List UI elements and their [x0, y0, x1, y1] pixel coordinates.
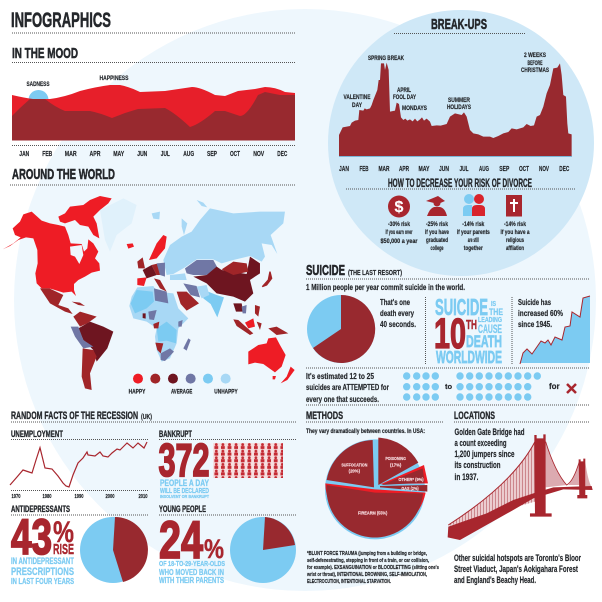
text: to: to: [445, 382, 452, 391]
legend: UNHAPPY: [214, 388, 238, 395]
labels: pie: (17%): [390, 463, 402, 469]
text: one death: That's one: [380, 297, 410, 307]
axis: years: 2000: [106, 494, 114, 500]
axis: years: [12, 494, 148, 500]
text: earn: if you earn over: [386, 229, 413, 236]
text: increased 60%: increased 60%: [518, 308, 563, 318]
chart: world map: [3, 196, 295, 395]
text: estimated: It's estimated 12 to 25: [306, 371, 374, 381]
labels: pie: GAS (2%): [401, 486, 419, 491]
panel: suicide: [306, 262, 590, 405]
text: golden gate: Golden Gate Bridge had: [454, 427, 524, 437]
callout: 43%: 43: [11, 509, 52, 565]
chart: young people pie: [230, 517, 296, 583]
label: april fool day: [393, 87, 416, 101]
heading: around the world: AROUND THE WORLD: [12, 166, 115, 183]
region: russia: [152, 200, 285, 275]
panel: break-ups circle: [328, 10, 594, 276]
panel: locations: [448, 410, 593, 585]
text: golden gate: [454, 427, 524, 482]
subheading: the last resort: (THE LAST RESORT): [348, 270, 402, 277]
callout: 43%: IN LAST FOUR YEARS: [11, 577, 74, 586]
text: graduated: graduated: [426, 237, 448, 244]
text: for: for: [549, 382, 560, 391]
months axis: break-ups: JUL: [460, 166, 469, 173]
months axis: mood: [19, 151, 287, 158]
legend: AVERAGE: [171, 388, 193, 395]
text: footnote: ELECTROCUTION, INTENTIONAL STARVATION.: [307, 579, 391, 585]
label: summer holidays: [447, 97, 471, 111]
region: south america: [71, 312, 113, 390]
text: religious: -14% risk: [504, 221, 526, 228]
callout: 10th leading cause: THE: [489, 307, 503, 317]
text: graduated: college: [430, 245, 444, 252]
label: 2 weeks before christmas: CHRISTMAS: [521, 67, 549, 74]
heading: bankrupt: BANKRUPT: [159, 429, 192, 439]
months axis: break-ups: MAR: [378, 166, 390, 173]
months axis: break-ups: APR: [399, 166, 409, 173]
text: parents: are still: [468, 237, 479, 244]
text: footnote: self-defenestrating, stepping in front of a train, or car collision,: [307, 558, 429, 564]
chart: mood area chart: [12, 75, 295, 140]
label: sadness: SADNESS: [26, 81, 50, 88]
text: religious: if you have a: [500, 229, 530, 236]
callout: 24%: WHO MOVED BACK IN: [159, 568, 224, 577]
text: one death: death every: [380, 308, 414, 318]
region: asia: [185, 257, 272, 317]
label: 2 weeks before christmas: BEFORE: [528, 60, 543, 67]
axis: years: 1990: [74, 494, 84, 500]
label: summer holidays: SUMMER: [448, 97, 470, 104]
icon: graduate: [426, 196, 447, 216]
callout: 10th leading cause: 10: [434, 310, 466, 358]
axis: years: 2010: [138, 494, 148, 500]
chart: unemployment line: [10, 442, 147, 487]
region: middle east: [177, 283, 200, 311]
callout: 43%: IN ANTIDEPRESSANT: [11, 556, 74, 566]
callout: 10th leading cause: TH: [466, 317, 477, 332]
months axis: break-ups: JUN: [439, 166, 449, 173]
callout: 43%: PRESCRIPTIONS: [11, 566, 74, 578]
months axis: mood: NOV: [253, 151, 264, 158]
months axis: mood: FEB: [42, 151, 52, 158]
illustration: golden gate bridge: [448, 434, 593, 540]
region: southeast asia: [233, 305, 288, 335]
months axis: break-ups: AUG: [479, 166, 489, 173]
text: one death: [380, 297, 416, 329]
dots: twelve: [403, 372, 439, 401]
months axis: break-ups: MAY: [418, 166, 430, 173]
labels: pie: [341, 456, 424, 517]
months axis: break-ups: SEP: [499, 166, 510, 173]
label: april fool day: FOOL DAY: [393, 94, 416, 101]
text: one million: 1 Million people per year commit suicide in the world.: [306, 283, 465, 292]
text: parents: [457, 221, 490, 252]
heading: break-ups: BREAK-UPS: [431, 16, 487, 33]
text: graduated: [425, 221, 449, 252]
labels: pie: FIREARM (55%): [358, 511, 388, 517]
label: 2 weeks before christmas: [521, 52, 549, 74]
months axis: break-ups: [339, 166, 569, 173]
region: europe: [127, 235, 187, 292]
heading: random facts of the recession: RANDOM FACTS OF THE RECESSION: [11, 410, 138, 422]
chart: people grid: [213, 443, 283, 478]
text: religious: religious: [506, 237, 524, 244]
text: estimated: [306, 371, 389, 404]
dots: twenty-five: [456, 372, 541, 401]
region: mexico and central america: [40, 288, 73, 314]
callout: 10th leading cause: SUICIDE: [435, 294, 488, 320]
label: valentine day: DAY: [352, 102, 362, 109]
callout: 372: PEOPLE A DAY: [160, 478, 209, 489]
chart: antidepressants pie: [80, 517, 148, 583]
callout: 10th leading cause: CAUSE: [478, 322, 502, 336]
label: happiness: HAPPINESS: [100, 75, 129, 82]
callout: 372: [158, 434, 210, 499]
text: increased 60%: [518, 297, 563, 329]
axis: years: 1970: [12, 494, 20, 500]
callout: 10th leading cause: LEADING: [478, 317, 502, 324]
text: golden gate: in 1937.: [454, 472, 478, 482]
panel: methods: [306, 410, 443, 585]
text: parents: together: [464, 245, 483, 252]
text: other hotspots: and England's Beachy Head.: [454, 575, 536, 585]
callout: 43%: RISE: [53, 541, 74, 558]
text: golden gate: a count exceeding: [454, 438, 506, 448]
months axis: mood: OCT: [230, 151, 240, 158]
callout: 10th leading cause: DEATH: [466, 332, 502, 351]
text: increased 60%: Suicide has: [518, 297, 551, 307]
callout: 10th leading cause: WORLDWIDE: [436, 347, 502, 367]
heading: locations: LOCATIONS: [454, 410, 495, 422]
hudson bay: [70, 245, 83, 264]
icon: bible: [506, 195, 522, 216]
callout: 372: 372: [158, 434, 210, 486]
months axis: break-ups: NOV: [539, 166, 549, 173]
region: australia: [248, 337, 295, 383]
text: golden gate: 1,200 jumpers since: [454, 449, 514, 459]
legend: HAPPY: [129, 388, 146, 395]
labels: pie: SUFFOCATION: [341, 463, 368, 469]
label: 2 weeks before christmas: 2 WEEKS: [524, 52, 546, 59]
text: increased 60%: since 1945.: [518, 319, 552, 329]
region: africa: [129, 286, 191, 362]
callout: 43%: %: [53, 516, 74, 549]
text: estimated: suicides are ATTEMPTED for: [306, 382, 389, 392]
callout: 24%: 24: [159, 511, 203, 570]
months axis: break-ups: FEB: [360, 166, 368, 173]
text: graduated: if you have: [425, 229, 449, 236]
months axis: break-ups: JAN: [339, 166, 349, 173]
callout: 24%: WITH THEIR PARENTS: [159, 576, 224, 585]
text: footnote: wrist or throat), INTENTIONAL DROWNING, SELF-IMMOLATION,: [306, 572, 427, 578]
heading: random facts of the recession: (UK): [141, 414, 152, 421]
chart: methods pie: [325, 438, 428, 539]
callout: 372: WILL BE DECLARED: [160, 488, 209, 495]
months axis: break-ups: DEC: [559, 166, 569, 173]
heading: methods: METHODS: [306, 410, 343, 422]
heading: suicide: SUICIDE: [306, 262, 345, 279]
text: golden gate: its construction: [454, 460, 500, 470]
icon: cross: [567, 384, 576, 393]
labels: pie: OTHER* (9%): [398, 477, 424, 483]
region: north america: [3, 196, 112, 296]
chart: suicide pie: [307, 295, 375, 363]
months axis: mood: AUG: [183, 151, 195, 158]
text: religious: affliation: [506, 245, 524, 252]
chart: break-ups area: [339, 63, 572, 156]
label: valentine day: [344, 94, 371, 109]
text: one death: 40 seconds.: [380, 319, 416, 329]
text: parents: -14% risk: [462, 221, 485, 228]
months axis: mood: JUN: [137, 151, 147, 158]
caribbean: [72, 302, 85, 306]
labels: pie: POISONING: [385, 456, 406, 462]
text: earn: $50,000 a year: [380, 238, 418, 245]
callout: 372: INSOLVENT OR BANKRUPT: [160, 494, 209, 499]
callout: 24%: OF 18-TO-29-YEAR-OLDS: [159, 559, 225, 568]
chart: suicide increase: [520, 296, 590, 364]
text: earn: -30% risk: [388, 221, 410, 228]
label: mondays: MONDAYS: [402, 105, 427, 112]
heading: unemployment: UNEMPLOYMENT: [11, 429, 63, 439]
text: estimated: every one that succeeds.: [306, 394, 379, 404]
title: INFOGRAPHICS: [11, 9, 111, 32]
heading: young people: YOUNG PEOPLE: [159, 504, 206, 514]
icon: dollar: [388, 196, 410, 218]
text: footnote: [306, 551, 439, 585]
axis: years: 1980: [42, 494, 52, 500]
greenland: [100, 198, 137, 252]
months axis: mood: MAY: [113, 151, 124, 158]
labels: pie: (20%): [349, 469, 360, 475]
callout: 10th leading cause: [434, 294, 503, 367]
heading: in the mood: IN THE MOOD: [12, 45, 78, 62]
label: spring break: SPRING BREAK: [368, 55, 404, 62]
months axis: mood: MAR: [65, 151, 77, 158]
icon: parents: [463, 194, 485, 216]
heading: antidepressants: ANTIDEPRESSANTS: [11, 504, 70, 514]
months axis: mood: SEP: [207, 151, 217, 158]
callout: 43%: [11, 509, 74, 586]
months axis: mood: APR: [90, 151, 100, 158]
text: parents: if your parents: [457, 229, 490, 236]
callout: 24%: %: [204, 534, 224, 564]
icon: dollar: $: [395, 199, 404, 216]
text: they vary: They vary dramatically between countries. In USA:: [306, 428, 425, 435]
label: valentine day: VALENTINE: [344, 94, 371, 101]
text: other hotspots: [454, 553, 581, 585]
text: religious: [500, 221, 530, 252]
label: april fool day: APRIL: [397, 87, 411, 94]
text: footnote: for example). EXSANGUINATION or BLOODLETTING (slitting one's: [307, 565, 439, 571]
months axis: break-ups: OCT: [519, 166, 529, 173]
months axis: mood: DEC: [277, 151, 287, 158]
callout: 10th leading cause: IS: [491, 301, 496, 308]
months axis: mood: JAN: [19, 151, 29, 158]
legend: [129, 374, 238, 395]
text: earn: [380, 221, 418, 245]
text: graduated: -25% risk: [426, 221, 448, 228]
label: summer holidays: HOLIDAYS: [447, 104, 471, 111]
text: footnote: *BLUNT FORCE TRAUMA (jumping from a building or bridge,: [307, 551, 427, 557]
months axis: mood: JUL: [161, 151, 170, 158]
